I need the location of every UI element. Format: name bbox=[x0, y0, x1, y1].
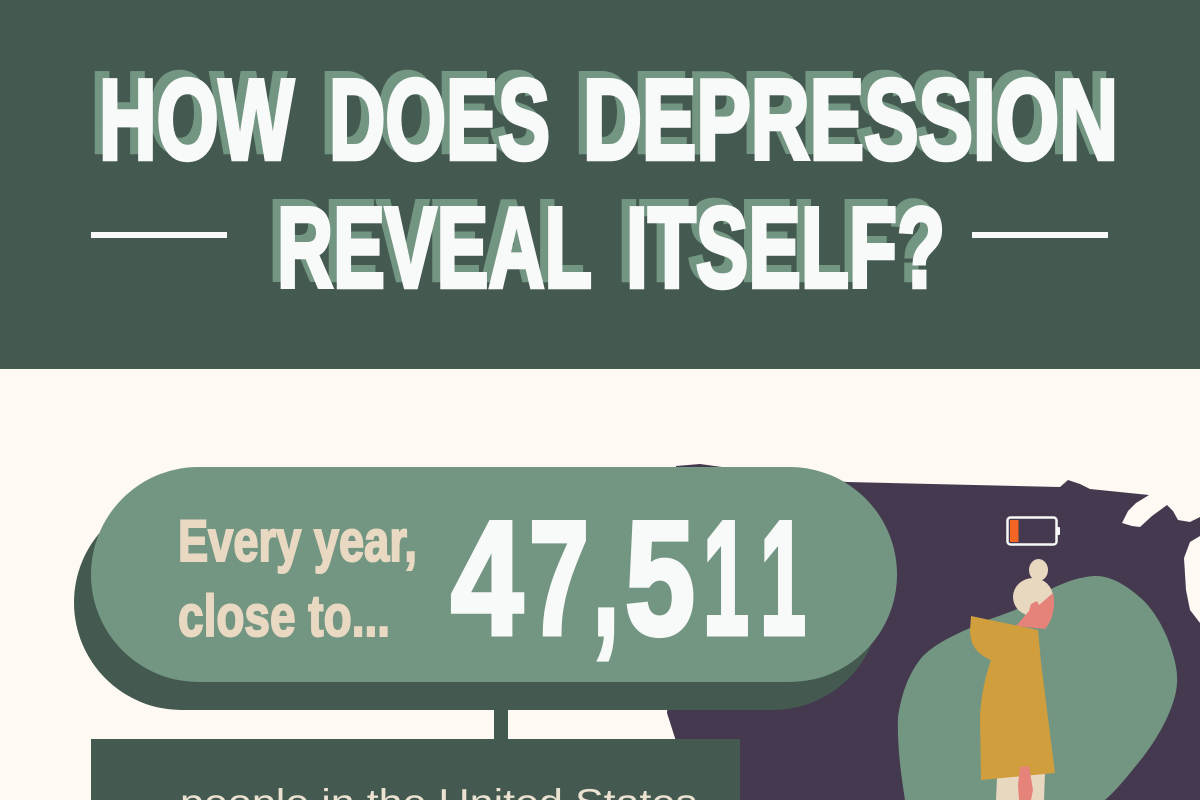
title: DOES bbox=[329, 57, 550, 184]
illustration: person with low battery bbox=[898, 518, 1177, 800]
title: HOW bbox=[99, 57, 294, 184]
pill shadow bbox=[74, 495, 880, 710]
face bbox=[1016, 593, 1054, 629]
big number: 1 bbox=[703, 488, 749, 669]
pill label bbox=[178, 509, 417, 649]
big number: 5 bbox=[625, 488, 695, 669]
title: ITSELF? bbox=[626, 185, 945, 312]
map of the United States bbox=[667, 464, 1200, 800]
mustard coat bbox=[970, 616, 1055, 780]
big number: 1 bbox=[760, 488, 806, 669]
big number bbox=[451, 488, 806, 669]
green blob bbox=[898, 576, 1177, 800]
pill label: Every year, bbox=[178, 509, 417, 574]
hand bbox=[1018, 766, 1033, 800]
big number: 4 bbox=[451, 488, 523, 669]
big number: , bbox=[593, 488, 619, 669]
big number: 7 bbox=[529, 488, 589, 669]
pill bbox=[91, 467, 897, 682]
title bbox=[99, 57, 1118, 312]
header band bbox=[0, 0, 1200, 369]
hair bbox=[1013, 578, 1053, 616]
text panel bbox=[91, 739, 740, 800]
connector stem bbox=[494, 709, 508, 740]
title: REVEAL bbox=[277, 185, 592, 312]
legs bbox=[996, 772, 1045, 800]
title side rules bbox=[91, 232, 1108, 238]
icon: low battery bbox=[1008, 518, 1060, 544]
pill label: close to... bbox=[178, 584, 390, 649]
hair bun bbox=[1029, 559, 1048, 581]
